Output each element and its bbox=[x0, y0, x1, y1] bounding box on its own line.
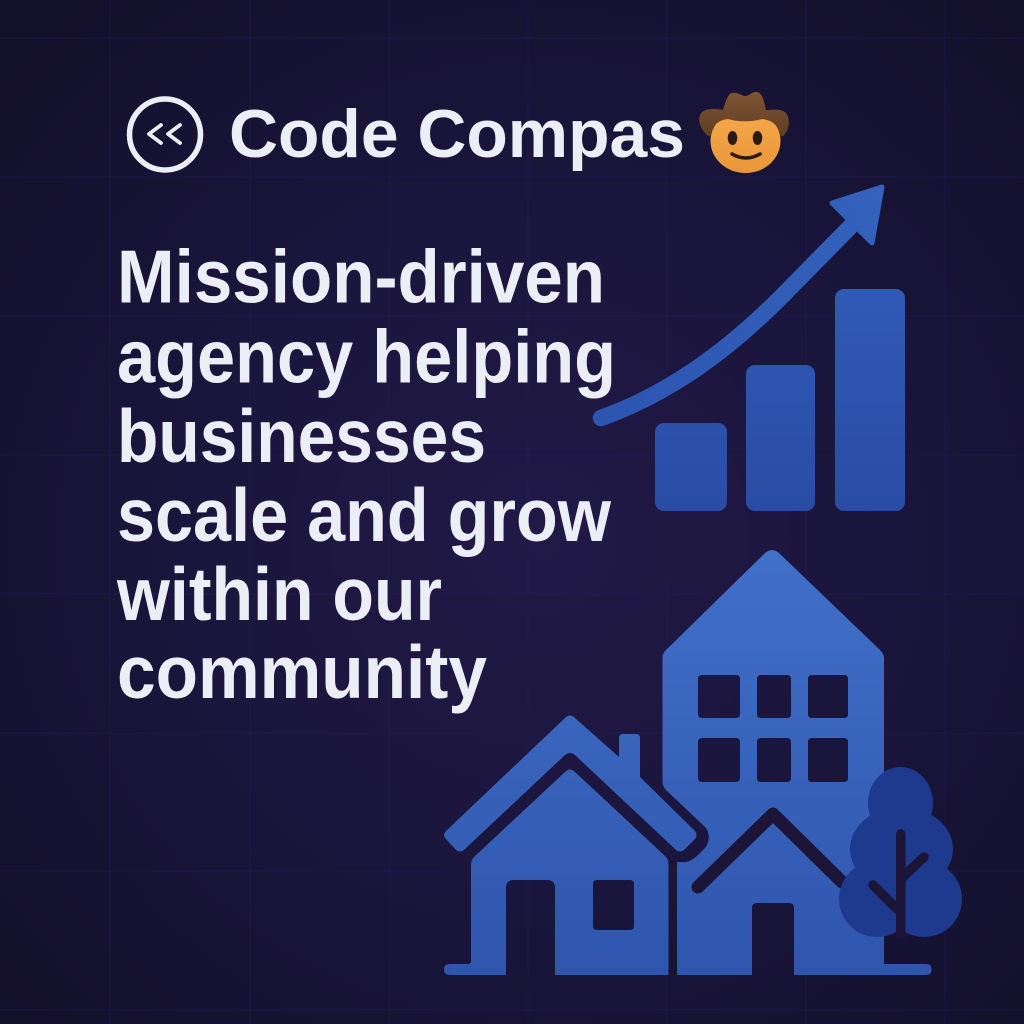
headline: within our bbox=[116, 552, 442, 636]
apartment building bbox=[662, 550, 932, 975]
house body with door and window bbox=[444, 770, 668, 975]
bar: medium bbox=[746, 365, 815, 511]
headline: agency helping bbox=[117, 314, 616, 398]
icon: circular logo with double chevrons bbox=[130, 99, 200, 170]
small house roofline bbox=[698, 814, 842, 887]
headline bbox=[116, 234, 616, 714]
community buildings illustration bbox=[444, 550, 962, 975]
arrow: upward growth trend bbox=[601, 187, 882, 418]
house roof with chimney bbox=[444, 716, 696, 852]
icon: cowboy hat face emoji bbox=[699, 92, 789, 173]
headline: scale and grow bbox=[117, 473, 612, 557]
headline: Mission-driven bbox=[117, 234, 605, 318]
bar: tall bbox=[835, 289, 905, 511]
tree bbox=[839, 767, 962, 938]
main house bbox=[444, 716, 696, 975]
bar: small bbox=[655, 423, 727, 511]
headline: businesses bbox=[117, 394, 486, 478]
brand header bbox=[130, 92, 789, 173]
growth chart bbox=[601, 187, 905, 511]
brand name: Code Compas bbox=[229, 96, 685, 172]
headline: community bbox=[117, 630, 487, 714]
